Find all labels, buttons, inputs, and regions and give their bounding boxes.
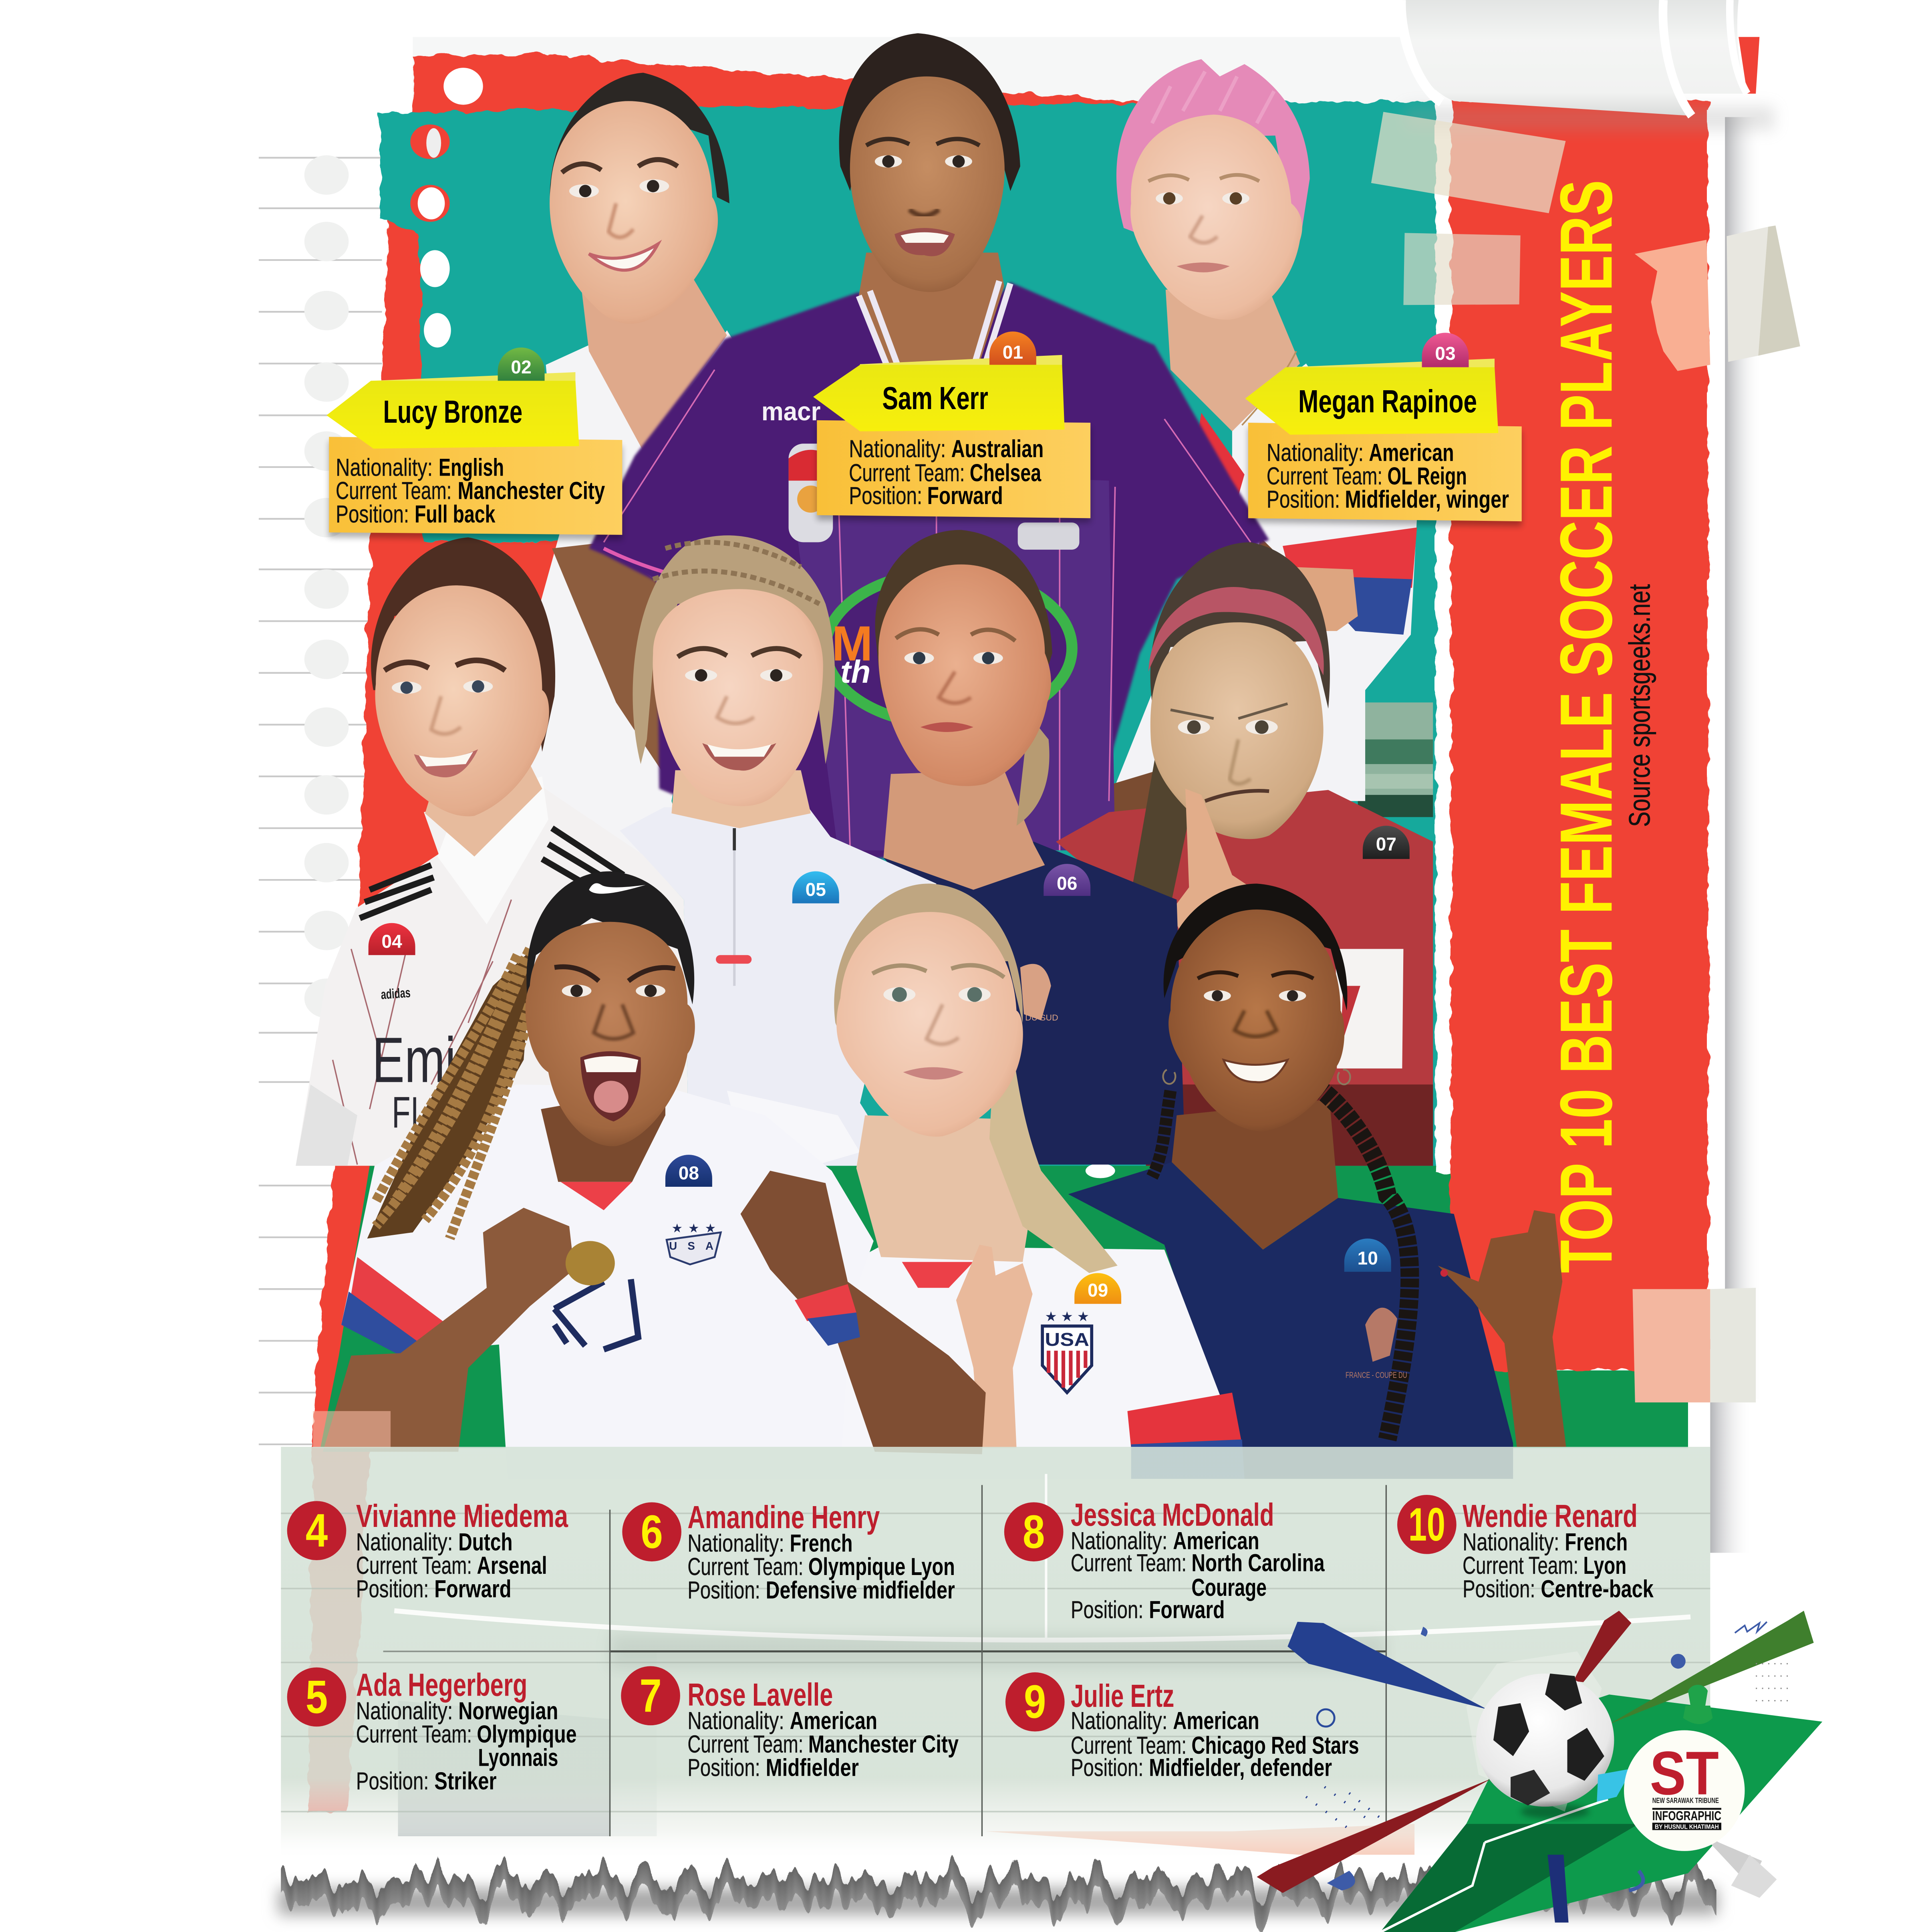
praying hands <box>956 1245 1033 1448</box>
icon: blue star streak <box>1287 1622 1487 1709</box>
rooster crest on jersey <box>1346 1308 1407 1380</box>
callout: Sam Kerr: Forward <box>927 482 1003 510</box>
entry 5 Ada Hegerberg: Olympique <box>477 1720 577 1748</box>
green ring logo: th <box>840 654 870 690</box>
callout: Sam Kerr: Australian <box>951 435 1044 463</box>
bottom info panel background <box>281 1447 1710 1861</box>
rooster crest: DU SUD <box>1025 1013 1058 1022</box>
callout: Megan Rapinoe: Nationality: <box>1267 439 1364 466</box>
neck <box>859 253 1004 407</box>
mesh sleeve <box>296 1085 357 1166</box>
decorative dots and ring <box>1306 1622 1793 1890</box>
nike logo on headband <box>589 883 646 894</box>
entry 9 Julie Ertz: American <box>1173 1707 1259 1734</box>
entry 6 Amandine Henry: Defensive midfielder <box>766 1576 955 1604</box>
player 3 Megan Rapinoe photo <box>1109 59 1417 801</box>
entry 5 Ada Hegerberg: Nationality: <box>356 1697 453 1725</box>
pin 01: 01 <box>1003 342 1023 363</box>
entry 8 Jessica McDonald: Nationality: <box>1071 1527 1167 1555</box>
entry 7 Rose Lavelle: Rose Lavelle <box>687 1677 833 1712</box>
pin 05: 05 <box>806 879 826 900</box>
light block under panel <box>610 1652 657 1836</box>
pin 10 <box>1344 1238 1391 1272</box>
dreads <box>367 949 536 1238</box>
red torn paper, top and left <box>308 54 1435 1811</box>
player 4 Vivianne Miedema photo <box>296 537 687 1166</box>
entry 6 Amandine Henry: Amandine Henry <box>687 1499 880 1535</box>
USA crest: USA <box>1045 1329 1089 1350</box>
entry 8 Jessica McDonald: North Carolina <box>1191 1549 1325 1577</box>
entry 10 Wendie Renard: Lyon <box>1583 1552 1626 1579</box>
entry 6 Amandine Henry: French <box>790 1529 853 1557</box>
neck <box>582 277 727 451</box>
callout: Sam Kerr: Sam Kerr <box>882 380 988 416</box>
entry 5 Ada Hegerberg: Position: <box>356 1767 429 1795</box>
pin 09: 09 <box>1088 1280 1108 1301</box>
mac sponsor: macr <box>762 397 821 426</box>
entry 7 Rose Lavelle: Manchester City <box>808 1730 959 1758</box>
player 1 Sam Kerr photo <box>552 33 1290 863</box>
pin 07: 07 <box>1376 833 1396 854</box>
entry 7 Rose Lavelle: American <box>790 1707 877 1734</box>
entry 7 Rose Lavelle: Nationality: <box>687 1707 784 1734</box>
entry 5 Ada Hegerberg: Current Team: <box>356 1720 472 1748</box>
callout: Lucy Bronze: English <box>439 454 504 481</box>
callout: Megan Rapinoe <box>1245 333 1522 526</box>
panel rule lines and field marks <box>281 1474 1710 1836</box>
entry 7 Rose Lavelle: Position: <box>687 1754 760 1781</box>
icon: cyan ribbon <box>1597 1769 1633 1802</box>
callout: Lucy Bronze: Manchester City <box>458 477 605 505</box>
sponsor text: Emi <box>372 1024 456 1096</box>
entry 9 Julie Ertz: Nationality: <box>1071 1707 1167 1734</box>
entry 6 Amandine Henry: 6 <box>641 1505 663 1558</box>
entry 4 Vivianne Miedema: Nationality: <box>356 1528 453 1556</box>
entry 5 Ada Hegerberg: 5 <box>306 1670 328 1723</box>
callout: Sam Kerr: Current Team: <box>849 459 965 487</box>
translucent tape on left edge of bottom panel <box>313 1411 391 1448</box>
W-League badge right <box>1018 522 1079 550</box>
row 3 players <box>323 871 1566 1479</box>
salmon wedge under panel <box>986 1824 1414 1863</box>
pin 08: 08 <box>679 1163 699 1184</box>
row 2 players <box>296 530 1433 1166</box>
player 6 Amandine Henry photo <box>875 530 1185 1165</box>
adidas: adidas <box>381 985 411 1002</box>
face <box>550 101 718 324</box>
jersey <box>589 282 1269 863</box>
entry 8 Jessica McDonald: American <box>1173 1527 1259 1555</box>
callout: Lucy Bronze: Position: <box>336 500 409 528</box>
green ring logo: M <box>832 617 873 672</box>
entry 4 Vivianne Miedema: Vivianne Miedema <box>356 1498 568 1534</box>
gray block under panel <box>398 1701 610 1836</box>
logo: New Sarawak Tribune infographic: ST <box>1650 1738 1719 1807</box>
icon: goal net <box>1466 1652 1602 1811</box>
torn bottom edge <box>278 1855 1718 1915</box>
entry 7 Rose Lavelle: 7 <box>639 1669 662 1722</box>
pin 07 <box>1363 826 1410 859</box>
pin 06: 06 <box>1057 873 1077 894</box>
W-League badge left <box>789 444 833 542</box>
shirt <box>530 330 751 863</box>
entry 5 Ada Hegerberg: Striker <box>434 1767 497 1795</box>
icon: soccer ball <box>1476 1674 1614 1819</box>
tape pieces <box>1371 112 1800 1402</box>
white hole in red paper <box>443 68 483 105</box>
rooster crest <box>1020 964 1058 1022</box>
pin 05 <box>792 871 839 903</box>
jersey stripes <box>604 370 1251 850</box>
number on jersey <box>554 1279 638 1349</box>
entry 10 Wendie Renard: Centre-back <box>1541 1575 1654 1603</box>
icon: navy star streak <box>1547 1855 1569 1922</box>
entry 5 Ada Hegerberg <box>287 1667 577 1795</box>
entry 7 Rose Lavelle <box>621 1666 959 1781</box>
right shadow <box>1725 117 1762 1399</box>
entry 10 Wendie Renard: Current Team: <box>1463 1552 1578 1579</box>
rolled paper corner <box>1401 0 1774 131</box>
entry 9 Julie Ertz: Chicago Red Stars <box>1191 1732 1359 1759</box>
icon: green map pin <box>1683 1685 1712 1724</box>
callout: Megan Rapinoe: OL Reign <box>1387 462 1467 490</box>
entry 4 Vivianne Miedema: Current Team: <box>356 1552 472 1579</box>
hair <box>839 33 1020 191</box>
player 4 Vivianne Miedema photo: FI <box>392 1088 419 1137</box>
left sleeve bands <box>351 1257 456 1353</box>
callout: Lucy Bronze <box>326 347 622 540</box>
pin 02 <box>498 347 545 382</box>
notebook paper lines and punch holes <box>259 155 382 1444</box>
entry 4 Vivianne Miedema: 4 <box>306 1504 328 1557</box>
earrings <box>1163 1070 1350 1085</box>
player 9 Julie Ertz photo <box>765 883 1245 1479</box>
USA badge and gold patch: USA <box>669 1240 713 1252</box>
right sleeve bands <box>795 1284 856 1321</box>
entry 9 Julie Ertz: Current Team: <box>1071 1732 1187 1759</box>
entry 10 Wendie Renard: Position: <box>1463 1575 1535 1603</box>
player 5 Ada Hegerberg photo <box>620 535 937 1166</box>
logo: New Sarawak Tribune infographic: NEW SARAWAK TRIBUNE <box>1652 1796 1719 1805</box>
entry 8 Jessica McDonald: Courage <box>1191 1574 1267 1601</box>
callout: Megan Rapinoe: American <box>1369 439 1454 466</box>
icon: green field <box>1380 1694 1822 1932</box>
entry 6 Amandine Henry: Olympique Lyon <box>808 1553 955 1581</box>
entry 9 Julie Ertz: Position: <box>1071 1754 1143 1781</box>
logo: New Sarawak Tribune infographic: INFOGRAPHIC <box>1652 1809 1721 1823</box>
torn holes on left edge <box>410 125 451 347</box>
left arm and fist <box>323 1208 574 1452</box>
right red title panel <box>1435 101 1725 1417</box>
entry 9 Julie Ertz <box>1005 1672 1359 1781</box>
entry 4 Vivianne Miedema: Forward <box>434 1575 511 1603</box>
headband and face <box>526 871 694 1004</box>
callout: Megan Rapinoe: Current Team: <box>1267 462 1382 490</box>
icon: dark red star streak bottom <box>1257 1778 1492 1893</box>
shirt <box>341 1085 874 1479</box>
entry 10 Wendie Renard <box>1397 1495 1654 1603</box>
entry 8 Jessica McDonald <box>1004 1497 1325 1624</box>
entry 6 Amandine Henry <box>622 1499 955 1604</box>
pin 10: 10 <box>1358 1248 1378 1269</box>
player 8 Jessica McDonald photo <box>323 871 986 1479</box>
USA crest <box>1042 1309 1092 1393</box>
green ring logo <box>826 572 1072 725</box>
callout: Lucy Bronze: Nationality: <box>336 454 433 481</box>
USA badge and gold patch <box>566 1221 721 1285</box>
callout: Lucy Bronze: Full back <box>415 500 496 528</box>
pin 08 <box>665 1155 712 1187</box>
entry 7 Rose Lavelle: Current Team: <box>687 1730 803 1758</box>
entry 4 Vivianne Miedema <box>287 1498 568 1603</box>
entry 7 Rose Lavelle: Midfielder <box>766 1754 859 1781</box>
rooster crest on jersey: FRANCE - COUPE DU <box>1346 1370 1407 1380</box>
neck <box>541 1087 665 1182</box>
callout: Megan Rapinoe: Midfielder, winger <box>1345 486 1509 513</box>
entry 10 Wendie Renard: French <box>1565 1528 1628 1556</box>
entry 5 Ada Hegerberg: Lyonnais <box>478 1744 558 1772</box>
hair <box>550 73 729 216</box>
entry 8 Jessica McDonald: Forward <box>1149 1596 1225 1624</box>
entry 10 Wendie Renard: Wendie Renard <box>1463 1498 1638 1534</box>
pin 06 <box>1044 864 1090 896</box>
logo: New Sarawak Tribune infographic <box>1624 1730 1745 1851</box>
player 2 Lucy Bronze photo <box>530 73 751 863</box>
source: Source sportsgeeks.net <box>1623 584 1656 827</box>
entry 4 Vivianne Miedema: Arsenal <box>477 1552 547 1579</box>
callout: Sam Kerr: Position: <box>849 482 922 510</box>
pin 04: 04 <box>381 931 402 952</box>
icon: gray star streak <box>1698 1830 1777 1898</box>
pin 02: 02 <box>511 357 532 377</box>
teal background <box>378 101 1442 1171</box>
callout: Sam Kerr: Chelsea <box>970 459 1042 487</box>
entry 6 Amandine Henry: Current Team: <box>687 1553 803 1581</box>
player 10 Wendie Renard photo <box>1068 883 1566 1479</box>
entry 8 Jessica McDonald: Current Team: <box>1071 1549 1187 1577</box>
USA badge and gold patch: ★★★ <box>671 1221 716 1235</box>
player 7 Rose Lavelle photo <box>1056 542 1433 1166</box>
entry 10 Wendie Renard: Nationality: <box>1463 1528 1559 1556</box>
callout: Lucy Bronze: Lucy Bronze <box>383 394 522 430</box>
entry 8 Jessica McDonald: Jessica McDonald <box>1071 1497 1274 1533</box>
entry 5 Ada Hegerberg: Ada Hegerberg <box>356 1667 527 1702</box>
pin 03 <box>1422 333 1469 367</box>
callout: Sam Kerr: Nationality: <box>849 435 946 463</box>
callout: Megan Rapinoe: Megan Rapinoe <box>1298 383 1477 419</box>
face <box>850 77 1005 292</box>
entry 6 Amandine Henry: Nationality: <box>687 1529 784 1557</box>
entry 8 Jessica McDonald: Position: <box>1071 1596 1143 1624</box>
arms <box>552 542 677 786</box>
entry 9 Julie Ertz: Julie Ertz <box>1071 1678 1174 1714</box>
green field backdrop <box>320 702 1688 1448</box>
entry 4 Vivianne Miedema: Dutch <box>458 1528 513 1556</box>
icon: dark red star streak top <box>1573 1611 1631 1682</box>
callout: Megan Rapinoe: Position: <box>1267 486 1340 513</box>
entry 9 Julie Ertz: Midfielder, defender <box>1149 1754 1332 1781</box>
icon: green star streak <box>1609 1611 1814 1724</box>
logo: New Sarawak Tribune infographic: BY HUSNUL KHATIMAH <box>1655 1824 1719 1831</box>
right arm and fist <box>741 1171 986 1454</box>
pin 01 <box>989 331 1036 365</box>
collar <box>859 281 1010 397</box>
faint paper sheet <box>413 37 1435 111</box>
entry 9 Julie Ertz: 9 <box>1024 1676 1046 1728</box>
entry 5 Ada Hegerberg: Norwegian <box>458 1697 558 1725</box>
entry 6 Amandine Henry: Position: <box>687 1576 760 1604</box>
pin 04 <box>369 923 415 955</box>
entry 4 Vivianne Miedema: Position: <box>356 1575 429 1603</box>
entry 8 Jessica McDonald: 8 <box>1023 1505 1045 1558</box>
entry 10 Wendie Renard: 10 <box>1408 1498 1445 1551</box>
USA crest: ★★★ <box>1045 1309 1089 1324</box>
panel right shadow <box>1710 1399 1752 1553</box>
pin 03: 03 <box>1435 343 1456 364</box>
pin 09 <box>1074 1273 1121 1304</box>
callout: Lucy Bronze: Current Team: <box>336 477 451 505</box>
callout: Sam Kerr <box>813 331 1090 522</box>
nike swoosh <box>803 1352 843 1372</box>
